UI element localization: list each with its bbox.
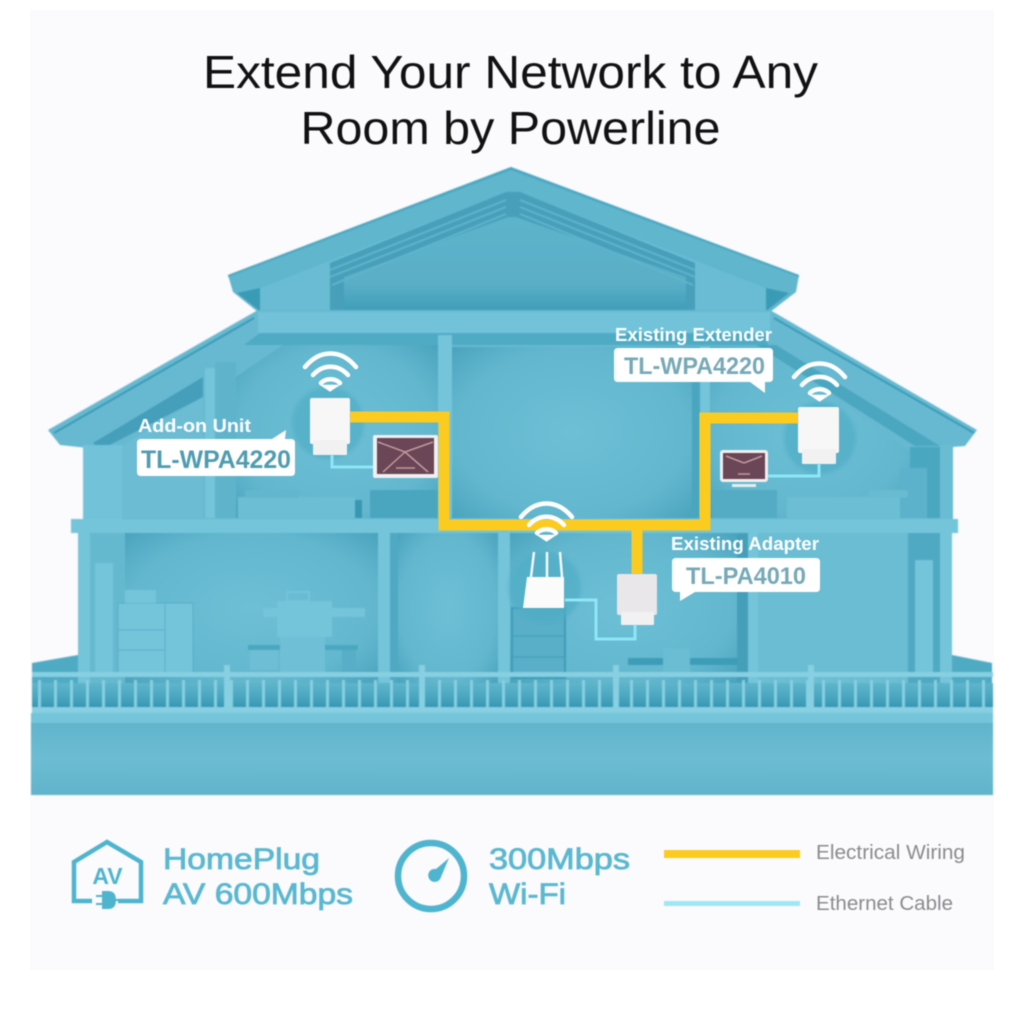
callout: existing adapter: Existing Adapter: [671, 534, 819, 554]
extender device: [798, 407, 839, 464]
lower floor furniture: [118, 590, 738, 678]
feature: Wi-Fi speed: [398, 843, 638, 911]
callout: existing extender: Existing Extender: [615, 325, 772, 345]
electrical wiring: [350, 417, 798, 574]
callout: add-on unit: TL-WPA4220: [141, 446, 291, 474]
legend: ethernet cable: [664, 892, 953, 915]
house base: [31, 713, 993, 795]
wifi icon: left: [305, 354, 356, 389]
upper floor rooms: [83, 335, 953, 520]
router device: [523, 552, 564, 608]
house illustration: [31, 167, 993, 795]
ethernet cables: [332, 455, 819, 639]
legend: electrical wiring: Electrical Wiring: [816, 841, 965, 864]
adapter device: [617, 574, 657, 625]
callout: add-on unit: [137, 416, 295, 476]
device halos: [292, 387, 856, 624]
title: [203, 46, 818, 154]
monitor: right: [720, 450, 768, 487]
icon: AV house with plug: [74, 842, 141, 908]
title: Room by Powerline: [300, 102, 720, 154]
callout: add-on unit: Add-on Unit: [138, 416, 251, 436]
title: Extend Your Network to Any: [203, 46, 818, 98]
wifi icon: right: [794, 364, 845, 399]
lower main roof and wall mass: [48, 310, 977, 520]
balcony floor and railing: [32, 665, 993, 714]
legend: [664, 841, 965, 915]
upper floor furniture: [238, 468, 927, 518]
feature text: HomePlug: [163, 843, 320, 876]
legend: ethernet cable: Ethernet Cable: [816, 892, 953, 915]
floor beam: [71, 519, 958, 533]
lower floor rooms: [78, 533, 952, 683]
feature text: Wi-Fi: [489, 878, 566, 911]
icon: AV house with plug: AV: [92, 863, 123, 889]
icon: speed gauge: [398, 843, 464, 909]
feature text: 300Mbps: [489, 843, 630, 876]
add-on unit device: [310, 398, 350, 455]
callout: existing extender: TL-WPA4220: [624, 353, 765, 380]
callout: existing adapter: TL-PA4010: [686, 563, 806, 590]
upper gable roof: [228, 167, 799, 312]
monitor: left: [373, 435, 438, 478]
side terraces: [32, 655, 992, 710]
feature text: AV 600Mbps: [163, 878, 353, 911]
callout: existing extender: [614, 325, 773, 393]
feature: HomePlug AV: [74, 842, 353, 911]
callout: existing adapter: [671, 534, 820, 601]
legend: electrical wiring: [664, 841, 965, 864]
wifi icon: centre: [521, 504, 572, 539]
